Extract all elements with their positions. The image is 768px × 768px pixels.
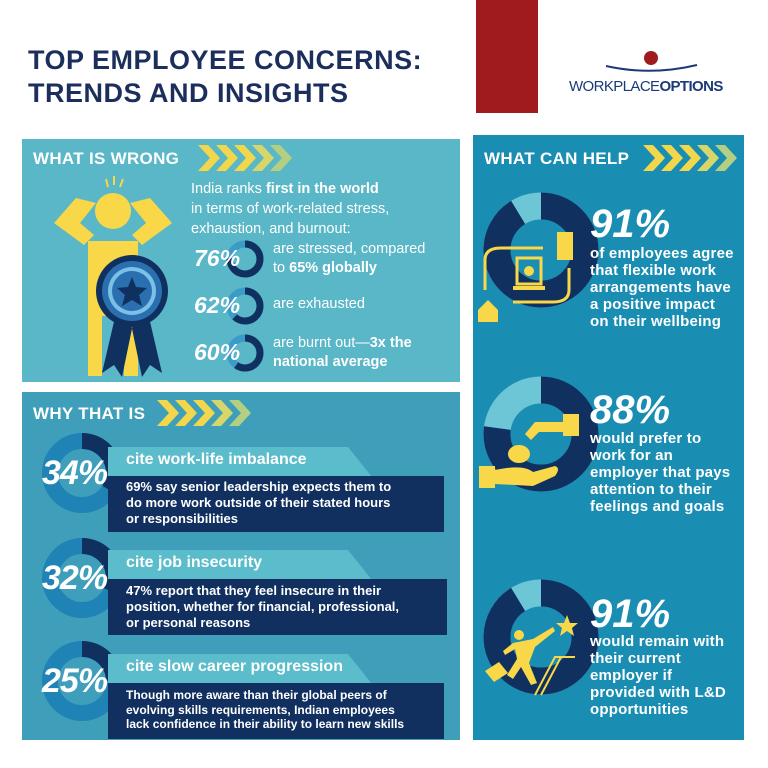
item: work-life imbalance: or responsibilities <box>126 511 238 526</box>
stat 60%: are burnt out—3x the <box>273 335 412 351</box>
stat: flexible work 91%: that flexible work <box>590 262 716 279</box>
stat: flexible work 91%: a positive impact <box>590 296 715 313</box>
stat 76%: 76% <box>194 245 240 271</box>
stat: L&D 91%: opportunities <box>590 701 688 718</box>
chevrons <box>643 145 737 171</box>
title: TRENDS AND INSIGHTS <box>28 78 349 108</box>
intro text: in terms of work-related stress, <box>191 201 389 217</box>
stat: attention 88%: 88% <box>590 388 670 432</box>
stat: flexible work 91%: arrangements have <box>590 279 731 296</box>
logo: WORKPLACEOPTIONS <box>569 78 723 95</box>
intro text: India ranks first in the world <box>191 181 379 197</box>
stat 76%: are stressed, compared <box>273 241 425 257</box>
stat: L&D 91%: provided with L&D <box>590 684 726 701</box>
stat 76% <box>194 240 425 278</box>
item: slow career progression: lack confidence in their ability to learn new skills <box>126 717 404 731</box>
item: work-life imbalance <box>42 433 444 532</box>
item: job insecurity: 47% report that they feel insecure in their <box>126 583 381 598</box>
heading: WHAT IS WRONG <box>33 149 179 168</box>
logo <box>569 51 723 95</box>
stat: L&D 91%: employer if <box>590 667 672 684</box>
stat: attention 88%: feelings and goals <box>590 498 724 515</box>
item: job insecurity <box>42 538 447 635</box>
stat 62%: are exhausted <box>273 296 365 312</box>
stat: flexible work 91% <box>478 192 734 330</box>
stat 60% <box>194 334 412 372</box>
red accent block <box>476 0 538 113</box>
title: TOP EMPLOYEE CONCERNS: <box>28 45 422 75</box>
panel: what can help <box>473 135 744 740</box>
chevrons <box>157 400 251 426</box>
item: slow career progression: Though more aware than their global peers of <box>126 688 387 702</box>
item: work-life imbalance: cite work-life imbalance <box>126 451 307 468</box>
stat 60%: 60% <box>194 339 240 365</box>
item: work-life imbalance: do more work outside of their stated hours <box>126 495 390 510</box>
title <box>28 45 422 108</box>
item: job insecurity: 32% <box>42 559 107 597</box>
stat: L&D 91% <box>484 580 726 718</box>
heading: WHY THAT IS <box>33 404 145 423</box>
chevrons <box>198 145 292 171</box>
stat 62%: 62% <box>194 292 240 318</box>
stat: attention 88% <box>479 376 730 515</box>
stat 76%: to 65% globally <box>273 260 377 276</box>
stat: flexible work 91%: of employees agree <box>590 245 734 262</box>
stat 60%: national average <box>273 354 387 370</box>
heading: WHAT CAN HELP <box>484 149 629 168</box>
stat: attention 88%: employer that pays <box>590 464 730 481</box>
stat: L&D 91%: their current <box>590 650 681 667</box>
item: work-life imbalance: 69% say senior leadership expects them to <box>126 479 391 494</box>
item: slow career progression: evolving skills requirements, Indian employees <box>126 702 395 716</box>
item: job insecurity: or personal reasons <box>126 615 250 630</box>
stat: attention 88%: would prefer to <box>590 430 701 447</box>
item: job insecurity: cite job insecurity <box>126 554 262 571</box>
item: job insecurity: position, whether for financial, professional, <box>126 599 399 614</box>
icon: stressed person with medal <box>54 176 172 377</box>
intro text: exhaustion, and burnout: <box>191 221 351 237</box>
item: work-life imbalance: 34% <box>42 454 107 492</box>
stat: flexible work 91%: on their wellbeing <box>590 313 721 330</box>
stat: L&D 91%: 91% <box>590 592 670 636</box>
item: slow career progression: cite slow career progression <box>126 658 343 675</box>
panel: what is wrong <box>22 139 460 382</box>
stat: L&D 91%: would remain with <box>590 633 724 650</box>
item: slow career progression: 25% <box>42 662 107 700</box>
intro text <box>191 181 389 237</box>
panel: why that is <box>22 392 460 740</box>
stat: flexible work 91%: 91% <box>590 202 670 246</box>
stat: attention 88%: work for an <box>590 447 673 464</box>
stat: attention 88%: attention to their <box>590 481 712 498</box>
item: slow career progression <box>42 641 444 739</box>
stat 62% <box>194 288 365 324</box>
